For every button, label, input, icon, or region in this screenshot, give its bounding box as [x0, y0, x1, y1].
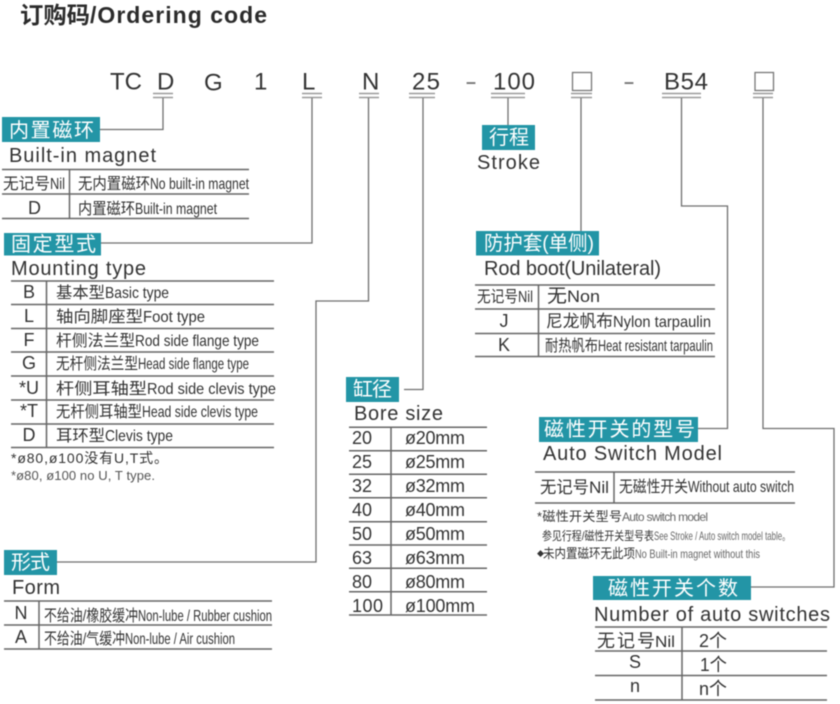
row: L: Foot type	[143, 309, 205, 326]
row: 32: ø32mm	[405, 476, 465, 496]
row: S	[629, 652, 727, 675]
row: 100: ø100mm	[405, 596, 475, 616]
row: nil: No built-in magnet	[150, 176, 249, 193]
row: G: 无杆侧法兰型	[56, 355, 138, 373]
ordering code row: G	[204, 70, 223, 96]
row: B	[23, 282, 169, 302]
row: J	[500, 311, 711, 331]
ordering code row: 25	[412, 68, 440, 96]
ordering code row: TC	[110, 68, 142, 96]
ordering code row: L	[302, 68, 315, 96]
row: nil: 无磁性开关	[619, 478, 688, 496]
row: 40	[352, 500, 465, 520]
row: nil: Nil	[518, 289, 533, 306]
row: A	[15, 627, 235, 648]
row: K: K	[498, 335, 510, 355]
row: 25: 25	[352, 452, 372, 472]
heading: bore size	[346, 377, 399, 402]
row: nil: 无内置磁环	[78, 175, 150, 193]
heading: rod boot: 防护套(单侧)	[484, 232, 594, 255]
heading: stroke: 行程	[489, 126, 529, 149]
row: G	[22, 353, 249, 373]
subheading: auto switch model: Auto Switch Model	[543, 443, 722, 465]
row: A: Non-lube / Air cushion	[125, 631, 235, 648]
row: nil: Without auto switch	[688, 479, 794, 496]
row: N	[14, 603, 272, 625]
connector: bore size	[404, 98, 423, 390]
row: 63: ø63mm	[405, 548, 465, 568]
row: 20: ø20mm	[405, 428, 465, 448]
row: F: 杆侧法兰型	[56, 332, 135, 350]
row: T: 无杆侧耳轴型	[56, 403, 142, 421]
row: nil: 无	[547, 286, 567, 307]
panel: built-in magnet	[2, 117, 249, 218]
ordering code row: -	[465, 68, 477, 96]
row: 80: 80	[352, 572, 372, 592]
ordering code row	[110, 68, 774, 98]
row: J: J	[500, 311, 508, 331]
title: 订购码	[20, 2, 90, 28]
row: B: Basic type	[105, 285, 169, 302]
subheading: bore size: Bore size	[354, 403, 443, 425]
row: nil: Nil	[50, 176, 65, 193]
subheading: stroke: Stroke	[477, 152, 540, 174]
row: nil: 无记号	[540, 478, 589, 497]
row: U	[19, 378, 276, 398]
connector: built-in magnet	[100, 98, 163, 130]
connector: stroke	[507, 98, 509, 125]
heading: number of auto switches: 磁性开关个数	[608, 577, 738, 600]
note: no built-in magnet: No Built-in magnet without this	[635, 547, 760, 561]
ordering code row: B54	[664, 68, 708, 96]
connector: rod boot	[580, 98, 582, 231]
row: 80: ø80mm	[405, 572, 465, 592]
row: S: S	[629, 652, 641, 672]
ordering code row: -	[623, 68, 635, 96]
row: nil: Nil	[589, 478, 609, 497]
note: mounting type English: *ø80, ø100 no U, T type.	[11, 468, 155, 483]
note: no built-in magnet: 未内置磁环无此项	[543, 546, 635, 561]
row: L: 轴向脚座型	[56, 308, 143, 326]
connector: mounting type	[101, 98, 312, 243]
row: T: Head side clevis type	[142, 404, 258, 421]
row: 100	[352, 596, 475, 616]
row: B: B	[23, 282, 35, 302]
panel: rod boot	[475, 231, 715, 356]
row: A: 不给油/气缓冲	[44, 630, 125, 648]
connector: auto switch model	[682, 98, 728, 428]
row: 40: ø40mm	[405, 500, 465, 520]
row: D: Clevis type	[105, 428, 173, 445]
subheading: rod boot: Rod boot(Unilateral)	[484, 258, 661, 280]
row: D: D	[22, 425, 36, 445]
row: N: Non-lube / Rubber cushion	[138, 608, 272, 625]
ordering code row: N	[362, 68, 379, 96]
row: nil: 无记号	[3, 175, 50, 193]
row: 50: 50	[352, 524, 372, 544]
row: L	[24, 306, 205, 326]
subheading: number of auto switches: Number of auto switches	[594, 604, 830, 626]
row: D	[22, 425, 173, 445]
row: 40: 40	[352, 500, 372, 520]
subheading: mounting type: Mounting type	[11, 258, 146, 280]
row: U: 杆侧耳轴型	[56, 380, 147, 398]
row: n	[630, 676, 727, 699]
row: 50: ø50mm	[405, 524, 465, 544]
row: 80	[352, 572, 465, 592]
row: 63: 63	[352, 548, 372, 568]
row: K	[498, 335, 713, 355]
row: 25: ø25mm	[405, 452, 465, 472]
row: 20	[352, 428, 465, 448]
row: D: 内置磁环	[78, 200, 135, 218]
row: F	[24, 330, 259, 350]
subheading: built-in magnet: Built-in magnet	[9, 145, 156, 167]
row: nil: Nil	[655, 634, 675, 651]
row: L: L	[24, 306, 34, 326]
ordering code row: D	[157, 68, 174, 96]
heading: auto switch model: 磁性开关的型号	[544, 418, 695, 441]
note: auto switch model: Auto switch model	[622, 510, 708, 524]
row: U: *U	[19, 378, 39, 398]
heading: bore size: 缸径	[353, 378, 392, 401]
row: F: Rod side flange type	[135, 333, 259, 350]
row: 20: 20	[352, 428, 372, 448]
row: G: Head side flange type	[138, 356, 249, 373]
row: n: n个	[699, 679, 727, 699]
row: nil: 2个	[699, 631, 727, 651]
note: mounting type Chinese: *ø80,ø100没有U,T式。	[11, 450, 168, 466]
row: D: D	[28, 198, 41, 218]
note: no built-in magnet: ◆	[537, 550, 544, 558]
panel: number of auto switches	[593, 576, 830, 700]
note: see table: 参见行程/磁性开关型号表	[542, 528, 654, 543]
panel: form	[4, 550, 272, 649]
row: 63	[352, 548, 465, 568]
panel: mounting type	[4, 233, 276, 483]
row: K: Heat resistant tarpaulin	[598, 338, 713, 355]
row: J: 尼龙帆布	[546, 312, 613, 331]
panel: auto switch model	[535, 417, 795, 561]
row: nil: Non	[567, 287, 600, 306]
connector: form	[57, 98, 368, 562]
title: /Ordering code	[90, 2, 267, 28]
row: B: 基本型	[56, 284, 105, 302]
row: D: 耳环型	[56, 427, 105, 445]
row: U: Rod side clevis type	[147, 381, 276, 398]
row: n: n	[630, 676, 640, 696]
note: auto switch model: *磁性开关型号	[537, 509, 622, 524]
heading: built-in magnet: 内置磁环	[9, 119, 94, 142]
ordering code row: 100	[493, 68, 535, 96]
row: 32: 32	[352, 476, 372, 496]
row: D: Built-in magnet	[135, 201, 217, 218]
row: 50	[352, 524, 465, 544]
row: K: 耐热帆布	[545, 337, 598, 355]
subheading: form: Form	[12, 577, 60, 599]
row: N: 不给油/橡胶缓冲	[44, 607, 138, 625]
row: N: N	[14, 603, 28, 623]
panel: stroke	[477, 125, 540, 174]
row: 32	[352, 476, 465, 496]
heading: mounting type: 固定型式	[11, 233, 96, 256]
row: G: G	[22, 353, 36, 373]
row: 100: 100	[352, 596, 383, 616]
row: A: A	[15, 627, 27, 647]
row: S: 1个	[700, 655, 727, 675]
panel: bore size	[346, 377, 487, 616]
row: T: *T	[20, 401, 38, 421]
heading: form	[4, 550, 57, 575]
row: T	[20, 401, 258, 421]
row: F: F	[24, 330, 34, 350]
row: nil: 无记号	[477, 288, 518, 306]
connector: number of auto switches	[751, 98, 834, 587]
row: 25	[352, 452, 465, 472]
heading: form: 形式	[11, 551, 50, 574]
row: J: Nylon tarpaulin	[613, 314, 711, 331]
row: nil: 无记号	[597, 631, 655, 651]
ordering code row: 1	[254, 68, 267, 96]
